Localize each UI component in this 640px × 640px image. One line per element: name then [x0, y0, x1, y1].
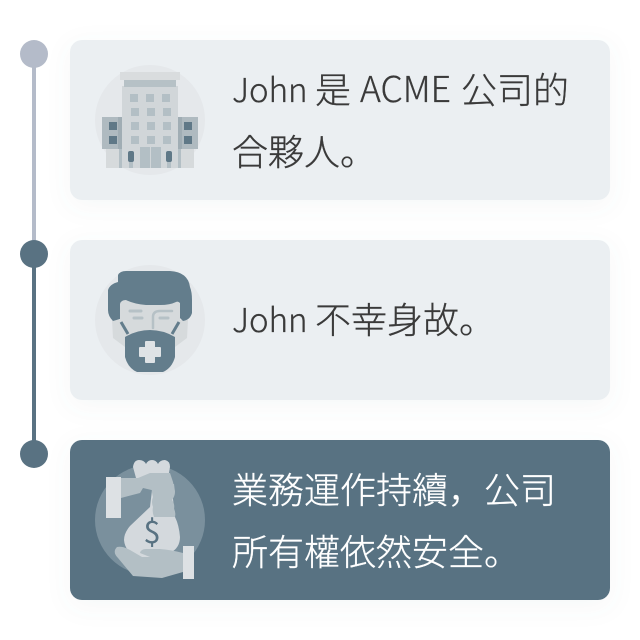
timeline segment 2 — [32, 254, 36, 454]
text: John dies: John — [232, 294, 308, 342]
panel: business continues — [70, 440, 610, 600]
card background 1 — [70, 40, 610, 200]
icon: man with medical mask — [95, 265, 205, 375]
text: business continues: 業務運作持續，公司 — [232, 462, 556, 514]
card background 2 — [70, 240, 610, 400]
timeline node 3 — [20, 440, 48, 468]
text: business continues — [232, 462, 556, 576]
panel: ACME partner — [70, 40, 610, 200]
icon: office building — [95, 65, 205, 175]
text: John dies — [232, 292, 495, 344]
text: John is partner: 公司的 — [461, 62, 569, 114]
timeline node 2 — [20, 240, 48, 268]
timeline segment 1 — [32, 54, 36, 254]
icon: money bag handover — [95, 460, 205, 579]
text: John is partner: ACME — [360, 62, 451, 113]
panel: John dies — [70, 240, 610, 400]
text: John is partner: 是 — [315, 62, 351, 114]
timeline — [20, 40, 48, 468]
text: John is partner: John — [232, 64, 308, 112]
text: business continues: 所有權依然安全。 — [232, 524, 520, 576]
card background 3 — [70, 440, 610, 600]
icon: money bag handover: $ — [143, 507, 161, 552]
timeline node 1 — [20, 40, 48, 68]
text: John dies: 不幸身故。 — [315, 292, 495, 344]
text: John is partner: 合夥人。 — [232, 124, 376, 176]
text: John is partner — [232, 62, 569, 176]
